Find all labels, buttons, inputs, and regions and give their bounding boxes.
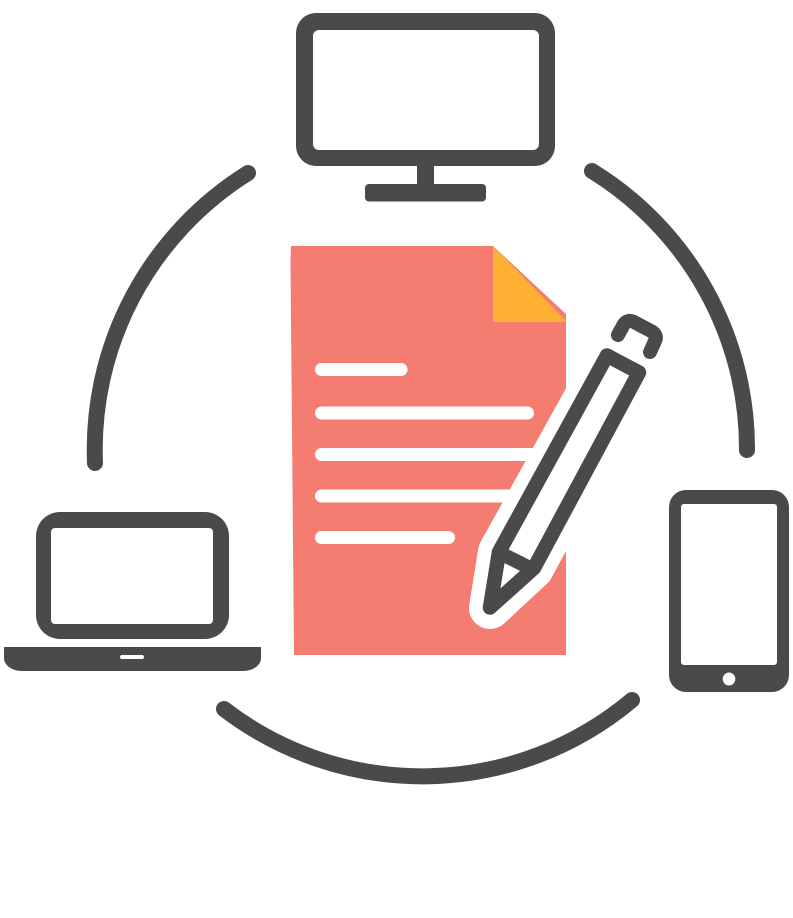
pencil white halo [490,356,638,608]
icon: laptop [4,512,261,671]
pencil tip divider [500,553,532,569]
icon: smartphone [669,490,789,692]
page fold [493,246,567,322]
icon: desktop monitor [296,13,555,202]
page sheet [290,246,566,655]
cycle arcs connecting devices [95,171,747,776]
document page [290,246,567,655]
pencil eraser clip [618,321,656,352]
pencil body [490,356,639,608]
text lines on page [315,363,540,544]
icon: pencil [490,321,656,608]
